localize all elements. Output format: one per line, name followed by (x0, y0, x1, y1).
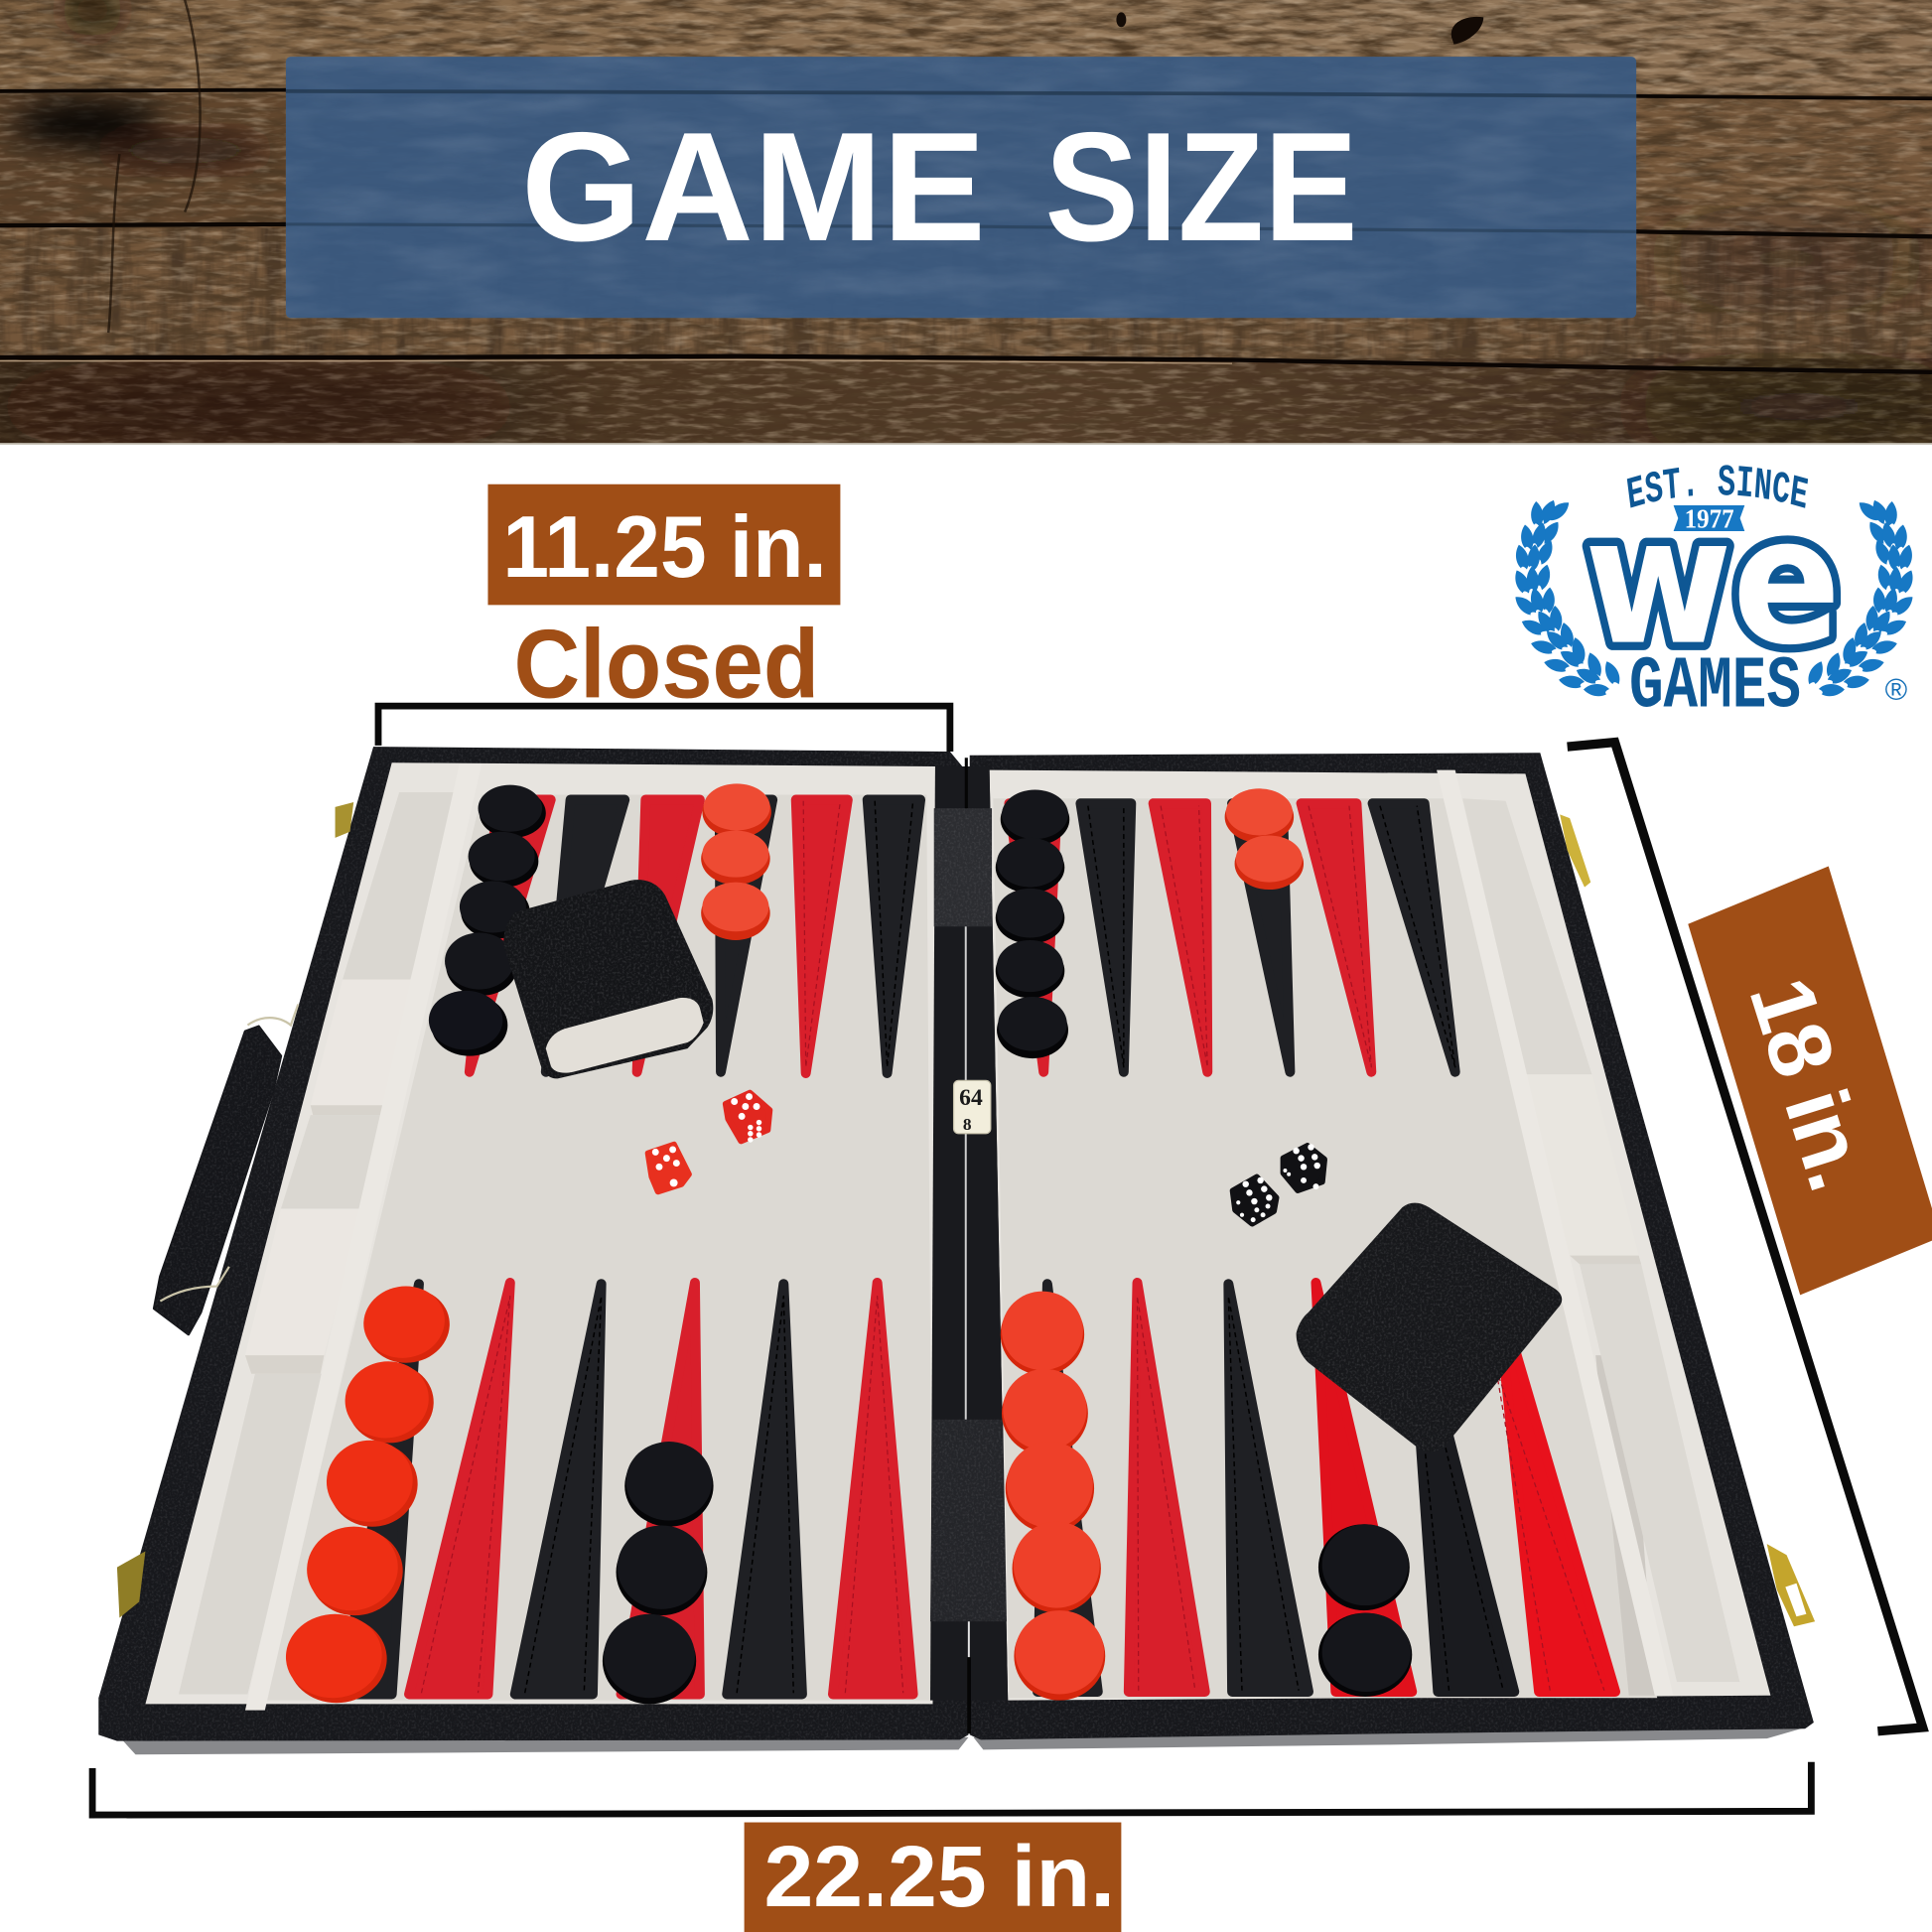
points: bottom left triangles (341, 1283, 913, 1694)
title text: GAME (521, 100, 986, 274)
checkers: bottom left red (282, 1280, 456, 1707)
brass latches (117, 802, 1815, 1626)
checkers: top left red (701, 783, 771, 940)
label: 18 in. (1688, 866, 1932, 1295)
label: 22.25 in.: 22.25 in. (763, 1829, 1115, 1925)
logo: registered mark: ® (1885, 673, 1908, 707)
title text: SIZE (1044, 100, 1358, 274)
black die: lower (1233, 1177, 1276, 1223)
dimension bracket: depth (1568, 743, 1923, 1731)
checkers: top right red (1225, 788, 1304, 890)
checkers: bottom right black (1318, 1524, 1412, 1697)
label: 11.25 in.: 11.25 in. (502, 497, 827, 596)
cup opening (546, 998, 704, 1073)
points: bottom right triangles (1037, 1283, 1615, 1692)
doubling cube: 64 (959, 1085, 983, 1111)
points: top right triangles (1009, 803, 1455, 1072)
board: case edge (123, 1727, 1805, 1754)
checkers: bottom left black (603, 1442, 714, 1704)
label: Closed: Closed (514, 609, 819, 718)
logo text: est since (1626, 465, 1809, 508)
title text (521, 100, 1358, 274)
checkers: top left black (429, 785, 546, 1056)
black die: upper (1283, 1144, 1324, 1190)
red die: lower (648, 1145, 689, 1191)
hinge: center spine with straps (930, 758, 1008, 1733)
title banner (286, 57, 1636, 318)
tray divider (1527, 1074, 1639, 1256)
logo text: games: GAMES (1629, 645, 1801, 729)
board: left half case (98, 747, 968, 1741)
red die: upper (726, 1093, 769, 1143)
dice cup: top left (503, 880, 713, 1078)
dimension bracket: width (92, 1762, 1811, 1815)
logo text: est since: EST. SINCE (1626, 465, 1809, 508)
tray floors (1462, 798, 1739, 1682)
dice cup: bottom right (1297, 1203, 1562, 1451)
doubling cube: 8 (963, 1115, 972, 1134)
checkers: bottom right red (1001, 1292, 1105, 1701)
doubling cube (954, 1080, 991, 1134)
dimension bracket: closed width (378, 706, 950, 752)
logo wordmark: we: we (1585, 480, 1841, 684)
label: 18 in.: 18 in. (1731, 966, 1890, 1202)
case handle (154, 1004, 298, 1334)
tray floors (179, 792, 457, 1694)
logo: left laurel (1511, 497, 1623, 697)
header: wood plank background (0, 0, 1932, 445)
tray dividers (245, 980, 412, 1355)
logo: WE Games (1515, 465, 1913, 729)
points: top left triangles (470, 799, 920, 1073)
board: right half case (970, 753, 1814, 1739)
logo: right laurel (1805, 497, 1917, 697)
checkers: top right black (996, 790, 1069, 1058)
logo ribbon: 1977: 1977 (1685, 504, 1734, 534)
